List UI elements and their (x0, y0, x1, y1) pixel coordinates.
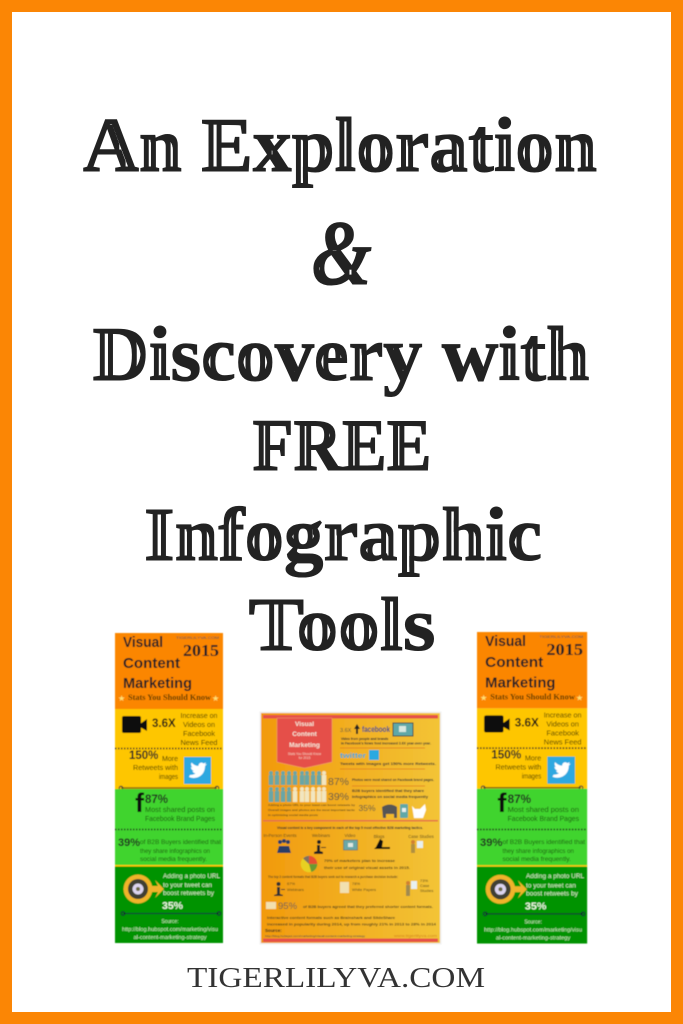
facebook stat: in Facebook's News feed increased 3.6X year-over-year. (341, 742, 431, 746)
tactics row: Visual content is a key component in each of the top 5 most effective B2B marketing tactics. (277, 826, 423, 830)
dark green panel: photo URL stat and source: 35% (162, 900, 184, 912)
people icons 87 percent: 87% (328, 776, 349, 788)
yellow panel: video and twitter stats: More (162, 756, 178, 763)
icon: flower with arrow (124, 874, 164, 904)
dark green panel: photo URL stat and source (115, 866, 223, 943)
yellow panel: video and twitter stats: Retweets with (133, 765, 178, 772)
title line: Discovery with: Discovery with (92, 311, 590, 397)
green panel: facebook and B2B stats: social media frequently. (503, 856, 571, 863)
yellow panel: video and twitter stats (477, 708, 587, 790)
green panel: facebook and B2B stats: they share infographics on (140, 848, 211, 855)
icon: flower with arrow (486, 875, 527, 904)
photo URL 35 percent row: 35% (358, 803, 376, 813)
photo URL 35 percent row (268, 803, 426, 818)
title line: FREE: FREE (252, 405, 432, 487)
header panel: Marketing (123, 675, 192, 692)
green panel: facebook and B2B stats: 39% (480, 837, 503, 849)
source: www.tigerlilyva.com (394, 934, 437, 938)
green panel: facebook and B2B stats: f (497, 787, 507, 818)
people icons 39 percent: 39% (328, 791, 349, 803)
header panel: TIGERLILYVA.COM (539, 634, 584, 639)
tactics row (264, 826, 434, 854)
yellow panel: video and twitter stats: 150% (129, 750, 158, 762)
red banner: Marketing (289, 742, 320, 749)
interactive content text (267, 915, 437, 926)
header panel: Visual (485, 633, 526, 650)
dark green panel: photo URL stat and source: Adding a photo URL (163, 873, 220, 880)
people icons 87 percent: Photos were most shared on Facebook brand pages. (352, 778, 434, 782)
twitter stat: Tweets with images get 150% more Retweets. (340, 761, 436, 766)
green panel: facebook and B2B stats: 87% (145, 794, 168, 806)
95 percent stat (266, 901, 433, 912)
green panel: facebook and B2B stats: Most shared posts on (508, 807, 579, 814)
red banner (277, 718, 332, 768)
photo URL 35 percent row: in optimizing social media posts (268, 813, 318, 817)
header panel: ★ (576, 693, 583, 702)
photo URL 35 percent row: Adding a photo URL to your tweet can boost retweets by (268, 803, 355, 807)
header panel: ★ (480, 693, 487, 702)
green panel: facebook and B2B stats: Facebook Brand Pages (508, 816, 579, 823)
red banner: for 2015 (299, 756, 311, 760)
header panel: 2015 (183, 641, 219, 660)
red banner: Stats You Should Know (288, 752, 322, 756)
green panel: facebook and B2B stats (115, 788, 223, 866)
icon: case study person (411, 840, 423, 853)
yellow panel: video and twitter stats: Increase on (544, 712, 582, 719)
header panel: Stats You Should Know (490, 692, 575, 701)
yellow panel: video and twitter stats: 150% (491, 749, 522, 762)
yellow panel: video and twitter stats: 3.6X (152, 718, 176, 730)
dark green panel: photo URL stat and source: Adding a photo URL (526, 873, 584, 880)
icon: cat (412, 804, 426, 818)
icon: video camera (122, 716, 147, 733)
dark green panel: photo URL stat and source: http://blog.hubspot.com/marketing/visu (122, 927, 218, 933)
top content formats: 73% (420, 878, 428, 883)
icon: video monitor (344, 840, 358, 850)
yellow panel: video and twitter stats (115, 709, 223, 790)
top content formats: The top 3 content formats that B2B buyers seek out to research a purchase decision include: (268, 875, 398, 879)
tactics row: Blogs (374, 834, 384, 839)
green panel: facebook and B2B stats: social media frequently. (140, 856, 207, 863)
header panel: Content (485, 654, 543, 671)
header panel: ★ (118, 694, 125, 703)
right mini infographic (477, 632, 587, 944)
yellow panel: video and twitter stats: More (525, 756, 541, 763)
dark green panel: photo URL stat and source: to your tweet can (163, 882, 212, 889)
top content formats: 78% (352, 881, 360, 886)
icon: monitor (393, 723, 413, 736)
red banner: Content (292, 731, 318, 738)
top content formats: White Papers (352, 887, 376, 892)
icon: tablet (400, 804, 408, 818)
header panel: Content (123, 655, 180, 672)
icon: twitter (184, 757, 211, 784)
source: Source: (265, 928, 282, 933)
title line: An Exploration: An Exploration (83, 102, 597, 188)
top content formats: Case (420, 883, 430, 888)
dark green panel: photo URL stat and source: al-content-marketing-strategy (134, 935, 207, 941)
source (265, 928, 437, 938)
dark green panel: photo URL stat and source: http://blog.hubspot.com/marketing/visu (484, 928, 582, 933)
green panel: facebook and B2B stats: of B2B Buyers identified that (140, 839, 221, 846)
green panel: facebook and B2B stats (477, 787, 587, 867)
green panel: facebook and B2B stats: f (135, 788, 145, 818)
yellow panel: video and twitter stats: Videos on (183, 722, 215, 729)
yellow panel: video and twitter stats: Facebook (183, 731, 216, 738)
title line: Tools: Tools (248, 583, 436, 667)
left mini infographic (115, 633, 223, 943)
top content formats (268, 875, 433, 896)
people icons 39 percent (269, 787, 429, 803)
dark green panel: photo URL stat and source (477, 867, 587, 944)
twitter stat: twitter (340, 751, 366, 760)
header panel: Visual (123, 634, 163, 651)
green panel: facebook and B2B stats: 87% (508, 793, 532, 806)
facebook stat: Video from people and brands (341, 737, 389, 741)
yellow panel: video and twitter stats: Retweets with (495, 765, 541, 772)
people icons 39 percent: B2B buyers identified that they share (352, 789, 424, 793)
yellow panel: video and twitter stats: Increase on (180, 713, 218, 720)
green panel: facebook and B2B stats: they share infographics on (503, 848, 574, 855)
green panel: facebook and B2B stats: Most shared posts on (145, 807, 215, 814)
icon: video camera (484, 715, 510, 732)
pie chart: 70% of marketers plan to increase (324, 858, 396, 863)
top content formats: Studies (420, 888, 433, 893)
top content formats: Webinars (287, 887, 304, 892)
source: http://blog.hubspot.com/marketing/visual-content-marketing-strategy (265, 934, 366, 938)
icon: people at table (277, 839, 291, 853)
pie chart (301, 856, 410, 872)
yellow panel: video and twitter stats: Facebook (546, 731, 580, 738)
photo URL 35 percent row: Overall images and photos are the most important tactic (268, 808, 355, 812)
dark green panel: photo URL stat and source: to your tweet can (526, 882, 576, 889)
95 percent stat: 95% (278, 901, 298, 912)
green panel: facebook and B2B stats: of B2B Buyers identified that (503, 839, 585, 846)
icon: blogger (374, 839, 390, 849)
header panel: ★ (212, 694, 219, 703)
facebook stat (340, 723, 431, 748)
interactive content text: increased in popularity during 2014, up from roughly 21% in 2013 to 28% in 2014 (267, 922, 437, 926)
green panel: facebook and B2B stats: 39% (118, 837, 140, 849)
title line: Infographic: Infographic (144, 493, 542, 577)
center infographic (260, 712, 442, 944)
header panel (115, 633, 223, 709)
yellow panel: video and twitter stats: images (522, 774, 542, 781)
title (83, 102, 597, 667)
dark green panel: photo URL stat and source: boost retweets by (163, 890, 215, 897)
icon: twitter (547, 757, 575, 784)
dark green panel: photo URL stat and source: Source: (524, 919, 542, 925)
icon: webinar presenter (314, 840, 326, 854)
yellow panel: video and twitter stats: Videos on (546, 722, 579, 728)
top content formats: 67% (287, 881, 295, 886)
interactive content text: Interactive content formats such as Brainshark and SlideShare (267, 915, 396, 920)
facebook stat: facebook (362, 725, 390, 734)
red banner: Visual (295, 721, 314, 728)
people icons 39 percent: infographics on social media frequently (352, 795, 429, 799)
header panel: Marketing (485, 674, 556, 691)
yellow panel: video and twitter stats: News Feed (544, 740, 582, 747)
yellow panel: video and twitter stats: News Feed (180, 740, 218, 747)
icon: elephant (382, 804, 397, 818)
footer website: TIGERLILYVA.COM (187, 962, 485, 994)
people icons 87 percent (269, 771, 434, 788)
dark green panel: photo URL stat and source: 35% (525, 900, 547, 912)
header panel (477, 632, 587, 708)
yellow panel: video and twitter stats: images (159, 774, 178, 781)
tactics row: Case Studies (408, 834, 434, 839)
title ampersand: & (312, 202, 372, 304)
twitter stat (340, 750, 436, 769)
tactics row: In-Person Events (264, 833, 296, 838)
green panel: facebook and B2B stats: Facebook Brand Pages (145, 816, 216, 823)
yellow panel: video and twitter stats: 3.6X (515, 717, 539, 729)
header panel: 2015 (546, 640, 583, 659)
dark green panel: photo URL stat and source: al-content-marketing-strategy (496, 936, 571, 942)
dark green panel: photo URL stat and source: Source: (161, 919, 179, 925)
header panel: TIGERLILYVA.COM (176, 635, 219, 640)
tactics row: Video (345, 833, 356, 838)
dark green panel: photo URL stat and source: boost retweets by (526, 890, 579, 897)
pie chart: their use of original visual assets in 2015. (324, 865, 410, 870)
95 percent stat: of B2B buyers agreed that they preferred shorter content formats. (303, 904, 433, 909)
facebook stat: 3.6X (340, 728, 352, 734)
tactics row: Webinars (312, 833, 330, 838)
header panel: Stats You Should Know (128, 693, 211, 702)
